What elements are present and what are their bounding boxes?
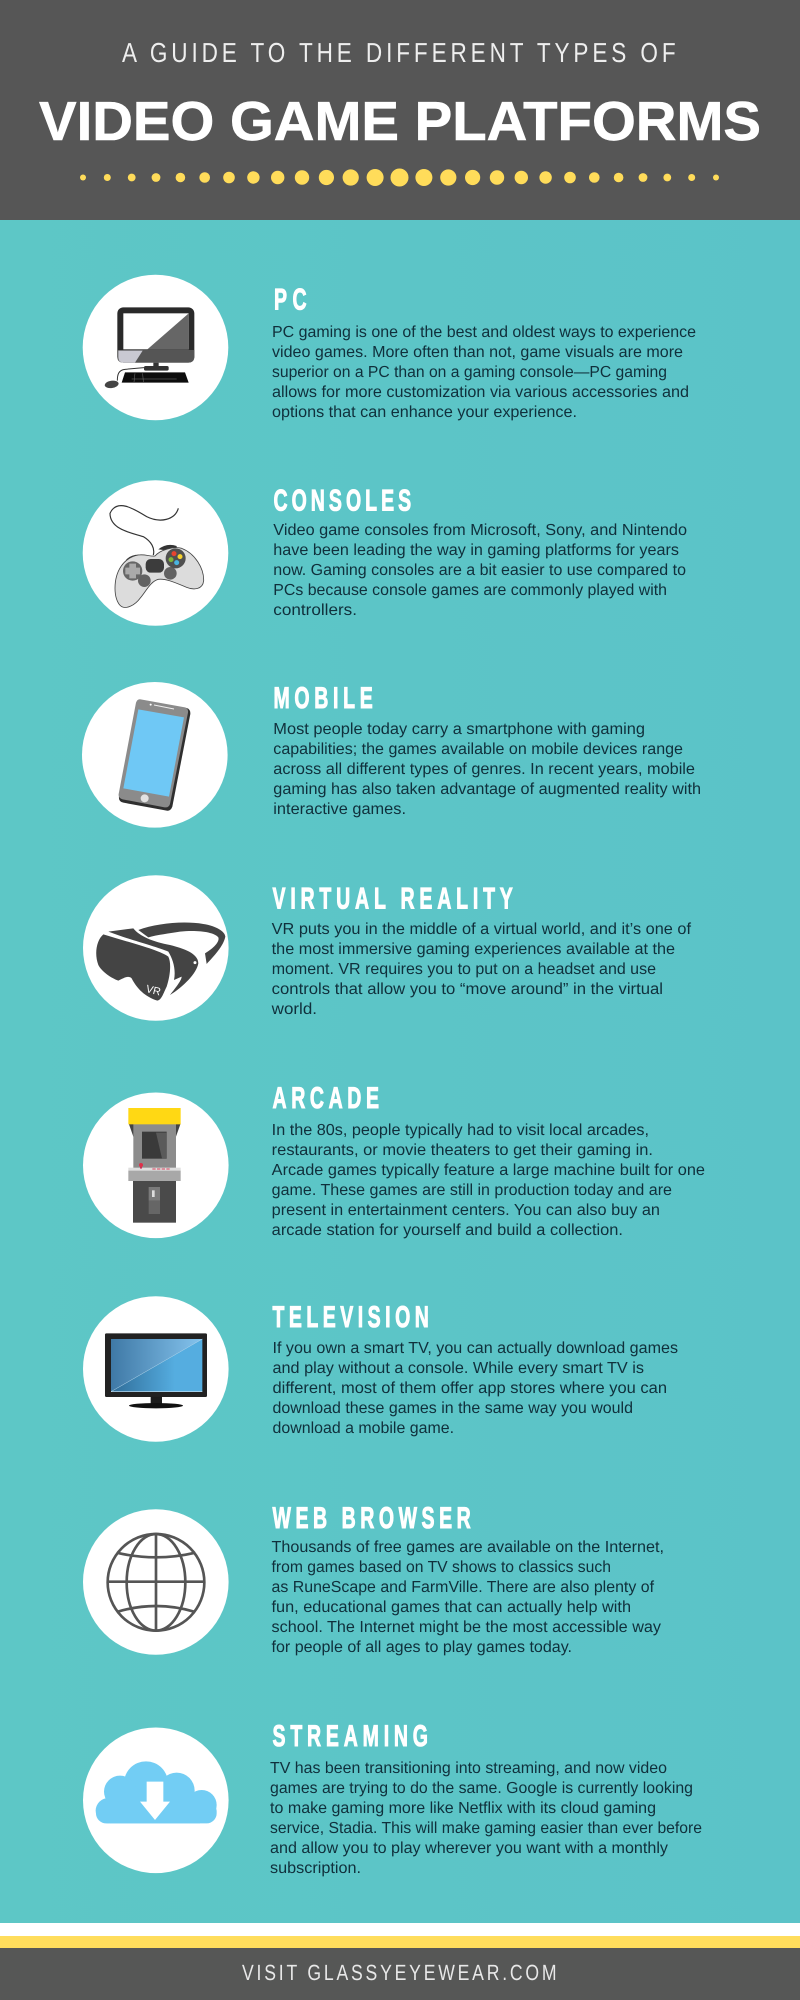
body text: Streaming: subscription. bbox=[270, 1860, 361, 1877]
body text: Web Browser: as RuneScape and FarmVille. There are also plenty of bbox=[272, 1579, 655, 1596]
body text: Mobile: capabilities; the games available on mobile devices range bbox=[273, 741, 683, 758]
body text: Television: and play without a console. While every smart TV is bbox=[272, 1360, 644, 1377]
body text: Streaming bbox=[270, 1760, 702, 1877]
body text: PC bbox=[272, 324, 696, 421]
subtitle: A GUIDE TO THE DIFFERENT TYPES OF bbox=[122, 37, 679, 68]
icon: game controller bbox=[83, 480, 228, 626]
heading: Streaming: STREAMING bbox=[272, 1720, 433, 1753]
heading: Web Browser: WEB BROWSER bbox=[272, 1502, 475, 1535]
title: VIDEO GAME PLATFORMS bbox=[39, 90, 761, 152]
heading: Consoles: CONSOLES bbox=[274, 484, 415, 518]
body text: Streaming: and allow you to play wherever you want with a monthly bbox=[270, 1840, 668, 1857]
icon: cloud download bbox=[83, 1728, 229, 1873]
dotted divider bbox=[80, 168, 719, 186]
panel: Virtual Reality bbox=[83, 875, 692, 1021]
body text: Television bbox=[272, 1340, 678, 1437]
icon: desktop computer bbox=[83, 275, 228, 420]
body text: Arcade: In the 80s, people typically had to visit local arcades, bbox=[272, 1122, 649, 1139]
icon: flat-screen television bbox=[83, 1296, 229, 1442]
body text: Web Browser: fun, educational games that can actually help with bbox=[272, 1599, 631, 1616]
footer link text: VISIT GLASSYEYEWEAR.COM bbox=[242, 1960, 559, 1985]
header banner bbox=[0, 0, 800, 220]
body text: Television: download these games in the same way you would bbox=[272, 1400, 633, 1417]
icon: VR headset: VR bbox=[145, 982, 162, 998]
body text: Arcade: Arcade games typically feature a large machine built for one bbox=[272, 1162, 705, 1179]
heading: Mobile: MOBILE bbox=[274, 682, 377, 715]
body text: Television: download a mobile game. bbox=[272, 1420, 454, 1437]
body text: Mobile: interactive games. bbox=[273, 801, 406, 818]
body text: Web Browser: for people of all ages to play games today. bbox=[272, 1639, 572, 1656]
body text: Arcade bbox=[272, 1122, 705, 1239]
body text: Arcade: arcade station for yourself and build a collection. bbox=[272, 1222, 623, 1239]
body text: Consoles: controllers. bbox=[273, 602, 357, 619]
panel: PC bbox=[83, 275, 696, 421]
body text: Television: If you own a smart TV, you can actually download games bbox=[272, 1340, 678, 1357]
body text: Consoles: PCs because console games are commonly played with bbox=[273, 582, 667, 599]
body text: Virtual Reality: world. bbox=[271, 1001, 317, 1018]
panel: Streaming bbox=[83, 1720, 702, 1877]
body text: PC: superior on a PC than on a gaming console—PC gaming bbox=[272, 364, 667, 381]
body text: Consoles: now. Gaming consoles are a bit easier to use compared to bbox=[273, 562, 686, 579]
heading: Arcade: ARCADE bbox=[272, 1082, 384, 1115]
panel: Consoles bbox=[83, 480, 687, 626]
panel: Web Browser bbox=[83, 1502, 664, 1656]
panel: Mobile bbox=[82, 682, 701, 828]
body text: Virtual Reality: VR puts you in the middle of a virtual world, and it’s one of bbox=[272, 921, 692, 938]
body text: Virtual Reality: the most immersive gaming experiences available at the bbox=[272, 941, 675, 958]
body text: Television: different, most of them offer app stores where you can bbox=[272, 1380, 667, 1397]
body text: Virtual Reality: controls that allow you to “move around” in the virtual bbox=[272, 981, 663, 998]
body text: Consoles: have been leading the way in gaming platforms for years bbox=[273, 542, 679, 559]
body text: Mobile: Most people today carry a smartphone with gaming bbox=[273, 721, 645, 738]
body text: PC: PC gaming is one of the best and oldest ways to experience bbox=[272, 324, 696, 341]
body text: PC: video games. More often than not, game visuals are more bbox=[272, 344, 683, 361]
icon: globe bbox=[83, 1509, 229, 1655]
icon: arcade cabinet bbox=[83, 1092, 229, 1238]
body text: Consoles: Video game consoles from Microsoft, Sony, and Nintendo bbox=[273, 522, 687, 539]
footer bbox=[0, 1923, 800, 2000]
heading: Virtual Reality: VIRTUAL REALITY bbox=[272, 882, 518, 915]
body text: Mobile bbox=[273, 721, 701, 818]
body text: Streaming: to make gaming more like Netflix with its cloud gaming bbox=[270, 1800, 656, 1817]
body text: Mobile: across all different types of genres. In recent years, mobile bbox=[273, 761, 695, 778]
icon: VR headset bbox=[83, 875, 229, 1021]
panel: Arcade bbox=[83, 1082, 705, 1239]
body text: Web Browser: from games based on TV shows to classics such bbox=[272, 1559, 611, 1576]
body text: Arcade: present in entertainment centers. You can also buy an bbox=[272, 1202, 660, 1219]
body text: Virtual Reality: moment. VR requires you to put on a headset and use bbox=[272, 961, 656, 978]
body text: Mobile: gaming has also taken advantage of augmented reality with bbox=[273, 781, 701, 798]
heading: Television: TELEVISION bbox=[272, 1301, 433, 1334]
body text: Streaming: service, Stadia. This will make gaming easier than ever before bbox=[270, 1820, 702, 1837]
body text: Web Browser: school. The Internet might be the most accessible way bbox=[272, 1619, 661, 1636]
body text: PC: options that can enhance your experience. bbox=[272, 404, 577, 421]
body text: Virtual Reality bbox=[271, 921, 692, 1018]
body text: Streaming: games are trying to do the same. Google is currently looking bbox=[270, 1780, 693, 1797]
body text: Arcade: restaurants, or movie theaters to get their gaming in. bbox=[272, 1142, 653, 1159]
icon: smartphone bbox=[82, 682, 228, 828]
panel: Television bbox=[83, 1296, 678, 1442]
body text: Consoles bbox=[273, 522, 687, 619]
body text: Arcade: game. These games are still in production today and are bbox=[272, 1182, 672, 1199]
body text: Web Browser bbox=[272, 1539, 664, 1656]
body text: PC: allows for more customization via various accessories and bbox=[272, 384, 689, 401]
heading: PC: PC bbox=[274, 284, 312, 316]
body text: Streaming: TV has been transitioning into streaming, and now video bbox=[270, 1760, 667, 1777]
body text: Web Browser: Thousands of free games are available on the Internet, bbox=[272, 1539, 664, 1556]
